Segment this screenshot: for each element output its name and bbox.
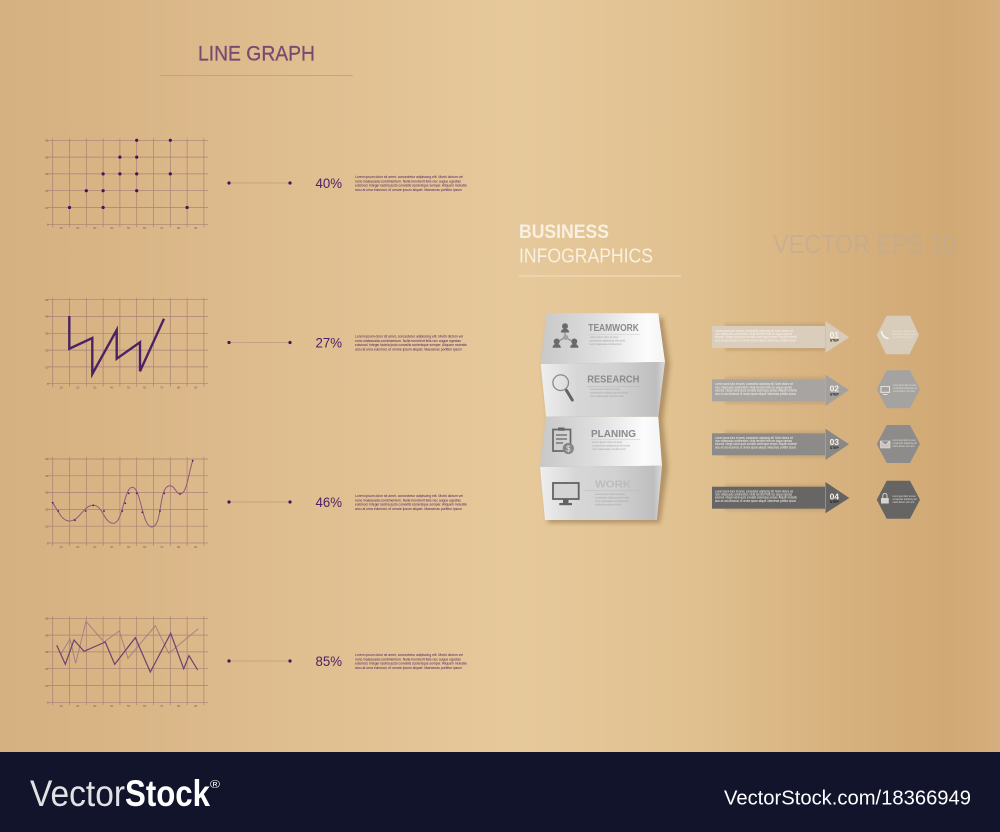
text: teamwork: consectetur adipiscing elit morbi [589,340,625,342]
chart: thick zigzag line: 10 [45,365,49,369]
logo: vectorstock [30,773,220,814]
chart: two overlapping lines: 10 [45,684,49,688]
row 1: connector, percentage and text: euismod. Integer lacinia justo convallis scelerisque semper. Aliquam molestie [355,183,467,188]
arrow step 03: 03 [830,437,839,447]
chart: two overlapping lines [45,616,208,708]
arrow step 02 [712,375,849,406]
chart: thick zigzag line [45,298,208,390]
row 4: connector, percentage and text: Lorem ipsum dolor sit amet, consectetur adipiscing elit. Morbi dictum vel [355,652,463,657]
chart: thick zigzag line: 30 [45,331,49,335]
row 4: connector, percentage and text: arcu at urna euismod, et ornare ipsum aliquet. Maecenas porttitor ipsum [355,665,462,670]
chart: smooth curve: 0 [47,541,49,545]
row 3: connector, percentage and text [227,493,467,511]
logo: vectorstock: ® [210,779,220,791]
heading: business infographics [519,221,681,276]
chart: smooth curve: 40 [110,545,114,549]
icon: lock [881,494,889,504]
arrow step 01: STEP [830,339,839,343]
hexagon: lock [877,481,920,519]
text: research: Lorem ipsum dolor sit amet [590,388,620,391]
chart: two overlapping lines: 80 [177,704,181,708]
chart: two overlapping lines: 20 [76,704,80,708]
icon: monitor [553,483,579,505]
arrow step 01: 01 [830,330,839,340]
icon: clipboard with coin: $ [566,444,571,453]
arrow step 04: arcu at urna euismod, et ornare ipsum aliquet. Maecenas porttitor ipsum [715,499,796,503]
heading: business infographics: INFOGRAPHICS [519,246,653,268]
row 2: connector, percentage and text: euismod. Integer lacinia justo convallis scelerisque semper. Aliquam molestie [355,342,467,347]
arrow step 04: Lorem ipsum dolor sit amet, consectetur adipiscing elit. Morbi dictum vel [715,489,793,493]
folded paper [540,313,670,523]
arrow step 03: Lorem ipsum dolor sit amet, consectetur adipiscing elit. Morbi dictum vel [715,436,793,440]
row 3: connector, percentage and text: Lorem ipsum dolor sit amet, consectetur adipiscing elit. Morbi dictum vel [355,493,463,498]
text: research [587,374,641,398]
panel: planing [540,417,662,467]
text: research: consectetur adipiscing elit morbi [590,392,629,394]
row 1: connector, percentage and text: Lorem ipsum dolor sit amet, consectetur adipiscing elit. Morbi dictum vel [355,174,463,179]
arrow step 03: nunc malesuada condimentum. Nulla hendrerit felis nec augue egestas [715,439,792,443]
chart: thick zigzag line: 80 [177,386,181,390]
icon: envelope [880,441,890,448]
text: teamwork: Lorem ipsum dolor sit amet [590,336,618,339]
text: planing [591,428,640,451]
text: planing: PLANING [591,428,636,440]
arrow step 01: arcu at urna euismod, et ornare ipsum aliquet. Maecenas porttitor ipsum [715,338,796,342]
arrow step 02: nunc malesuada condimentum. Nulla hendrerit felis nec augue egestas [715,385,792,389]
chart: smooth curve: 20 [45,508,49,512]
chart: scatter plot: 80 [177,226,181,230]
chart: scatter plot: 10 [60,226,63,230]
hexagon: mail: morbi dictum vel nunc [892,444,915,448]
arrow step 04: nunc malesuada condimentum. Nulla hendrerit felis nec augue egestas [715,492,792,496]
arrow step 01 [712,321,849,353]
chart: smooth curve: 10 [45,525,49,529]
text: planing: nunc malesuada condimentum [592,448,626,451]
hexagon: phone: morbi dictum vel nunc [892,335,915,339]
chart: smooth curve: 90 [194,545,198,549]
row 1: connector, percentage and text: 40% [316,176,342,191]
icon: phone [882,332,888,338]
chart: two overlapping lines: 40 [45,633,49,637]
chart: smooth curve: 60 [143,545,147,549]
hexagon: mail: Lorem ipsum dolor sit amet [892,438,916,442]
footer band [0,752,1000,832]
text: teamwork: nunc malesuada condimentum [589,343,622,346]
arrow step 04 [712,482,849,513]
arrow step 04: euismod. Integer lacinia justo convallis scelerisque semper. Aliquam molestie [715,496,797,500]
chart: thick zigzag line: 20 [45,348,49,352]
text: research: RESEARCH [587,374,639,386]
chart: two overlapping lines: 50 [45,616,49,620]
text: work: nulla hendrerit felis [595,504,622,506]
row 2: connector, percentage and text [227,334,467,351]
arrow step 02: STEP [830,392,839,396]
row 4: connector, percentage and text: 85% [316,654,342,669]
chart: scatter plot: 30 [93,226,97,230]
hexagon: mail [877,425,920,463]
row 2: connector, percentage and text: 27% [316,336,342,350]
chart: two overlapping lines: 30 [93,704,97,708]
row 4: connector, percentage and text [227,652,467,670]
hexagon: mail: consectetur adipiscing elit [892,441,917,445]
row 2: connector, percentage and text: Lorem ipsum dolor sit amet, consectetur adipiscing elit. Morbi dictum vel [355,334,463,338]
icon: small monitor [881,386,890,394]
chart: smooth curve: 50 [127,545,131,549]
text: teamwork: TEAMWORK [588,322,639,334]
icon: team [552,323,578,348]
chart: two overlapping lines: 20 [45,667,49,671]
arrow step 03: STEP [830,446,839,450]
chart: scatter plot [45,138,208,230]
chart: thick zigzag line: 30 [93,386,97,390]
chart: scatter plot: 60 [143,226,147,230]
chart: two overlapping lines: 40 [110,704,114,708]
text: work: consectetur adipiscing elit morbi [595,496,629,500]
image id: VectorStock.com/18366949 [724,786,971,810]
logo: vectorstock: Vector [30,773,125,814]
arrow step 03: euismod. Integer lacinia justo convallis scelerisque semper. Aliquam molestie [715,442,797,446]
chart: scatter plot: 40 [45,155,49,159]
chart: thick zigzag line: 90 [194,386,198,390]
hexagon: phone: Lorem ipsum dolor sit amet [892,329,915,333]
heading: business infographics: BUSINESS [519,221,609,243]
chart: scatter plot: 40 [110,226,114,230]
chart: scatter plot: 30 [45,172,49,176]
text: work: WORK [595,478,631,490]
chart: two overlapping lines: 10 [60,704,63,708]
arrow step 01: euismod. Integer lacinia justo convallis scelerisque semper. Aliquam molestie [715,335,797,339]
chart: smooth curve: 20 [76,545,80,549]
logo: vectorstock: Stock [125,773,210,814]
row 1: connector, percentage and text [227,174,467,192]
arrow step 04: STEP [830,500,839,504]
row 4: connector, percentage and text: euismod. Integer lacinia justo convallis scelerisque semper. Aliquam molestie [355,661,467,666]
chart: thick zigzag line: 60 [143,386,147,390]
arrow step 02: Lorem ipsum dolor sit amet, consectetur adipiscing elit. Morbi dictum vel [715,382,793,386]
row 1: connector, percentage and text: nunc malesuada condimentum. Nulla hendrerit felis nec augue egestas [355,178,461,183]
hexagon: phone [877,316,919,354]
hexagon: lock: morbi dictum vel nunc [892,500,915,504]
chart: scatter plot: 50 [45,138,49,142]
arrow step 01: nunc malesuada condimentum. Nulla hendrerit felis nec augue egestas [715,332,792,336]
hexagon: lock: consectetur adipiscing elit [892,497,917,501]
watermark: vector eps 10: VECTOR EPS 10 [773,229,956,259]
chart: two overlapping lines: 0 [47,701,49,705]
text: work: Lorem ipsum dolor sit amet [595,493,625,496]
chart: smooth curve: 70 [160,545,164,549]
chart: scatter plot: 0 [47,222,49,226]
arrow step 02: arcu at urna euismod, et ornare ipsum aliquet. Maecenas porttitor ipsum [715,392,796,396]
chart: two overlapping lines: 90 [194,704,198,708]
arrow step 04: 04 [830,491,839,501]
chart: thick zigzag line: 0 [47,382,49,386]
text: work: nunc malesuada condimentum [595,500,629,503]
hexagon: monitor: consectetur adipiscing elit [893,386,917,390]
text: planing: Lorem ipsum dolor sit amet [592,441,622,444]
arrow step 02: 02 [830,384,839,394]
chart: thick zigzag line: 50 [45,298,49,302]
chart: thick zigzag line: 40 [45,315,49,319]
panel: work [540,466,662,520]
arrow step 03 [712,429,849,460]
chart: scatter plot: 10 [45,206,49,210]
row 3: connector, percentage and text: arcu at urna euismod, et ornare ipsum aliquet. Maecenas porttitor ipsum [355,506,462,511]
row 3: connector, percentage and text: 46% [316,495,342,510]
chart: smooth curve: 30 [45,491,49,495]
text: work [585,478,640,506]
chart: thick zigzag line: 40 [110,386,114,390]
chart: smooth curve: 10 [60,545,63,549]
row 3: connector, percentage and text: euismod. Integer lacinia justo convallis scelerisque semper. Aliquam molestie [355,502,467,507]
icon: magnifier [553,375,572,400]
arrow step 03: arcu at urna euismod, et ornare ipsum aliquet. Maecenas porttitor ipsum [715,445,796,449]
hexagon: monitor: Lorem ipsum dolor sit amet [893,383,916,387]
chart: two overlapping lines: 60 [143,704,147,708]
chart: scatter plot: 50 [127,226,131,230]
chart: two overlapping lines: 70 [160,704,164,708]
row 4: connector, percentage and text: nunc malesuada condimentum. Nulla hendrerit felis nec augue egestas [355,656,461,661]
chart: thick zigzag line: 10 [60,386,63,390]
title: line graph: LINE GRAPH [198,42,315,66]
chart: smooth curve: 30 [93,545,97,549]
text: planing: consectetur adipiscing elit morbi [592,444,631,448]
chart: thick zigzag line: 50 [127,386,131,390]
chart: scatter plot: 70 [160,226,164,230]
chart: smooth curve: 50 [45,457,49,461]
chart: two overlapping lines: 30 [45,650,49,654]
hexagon: lock: Lorem ipsum dolor sit amet [892,494,916,498]
text: research: nunc malesuada condimentum [590,395,624,398]
chart: smooth curve: 40 [45,474,49,478]
arrow step 01: Lorem ipsum dolor sit amet, consectetur adipiscing elit. Morbi dictum vel [715,329,793,333]
text: teamwork [588,322,640,346]
chart: smooth curve [45,457,208,549]
row 1: connector, percentage and text: arcu at urna euismod, et ornare ipsum aliquet. Maecenas porttitor ipsum [355,187,462,192]
chart: thick zigzag line: 70 [160,386,164,390]
panel: research [541,362,665,417]
chart: thick zigzag line: 20 [76,386,80,390]
chart: scatter plot: 20 [76,226,80,230]
chart: scatter plot: 20 [45,189,49,193]
arrow step 02: euismod. Integer lacinia justo convallis scelerisque semper. Aliquam molestie [715,389,797,393]
hexagon: monitor: morbi dictum vel nunc [893,389,916,393]
chart: two overlapping lines: 50 [127,704,131,708]
chart: scatter plot: 90 [194,226,198,230]
panel: teamwork [541,313,665,364]
hexagon: phone: consectetur adipiscing elit [892,332,916,336]
row 2: connector, percentage and text: nunc malesuada condimentum. Nulla hendrerit felis nec augue egestas [355,338,461,343]
row 3: connector, percentage and text: nunc malesuada condimentum. Nulla hendrerit felis nec augue egestas [355,497,461,502]
hexagon: monitor [877,370,920,408]
chart: smooth curve: 80 [177,545,181,549]
row 2: connector, percentage and text: arcu at urna euismod, et ornare ipsum aliquet. Maecenas porttitor ipsum [355,346,462,351]
